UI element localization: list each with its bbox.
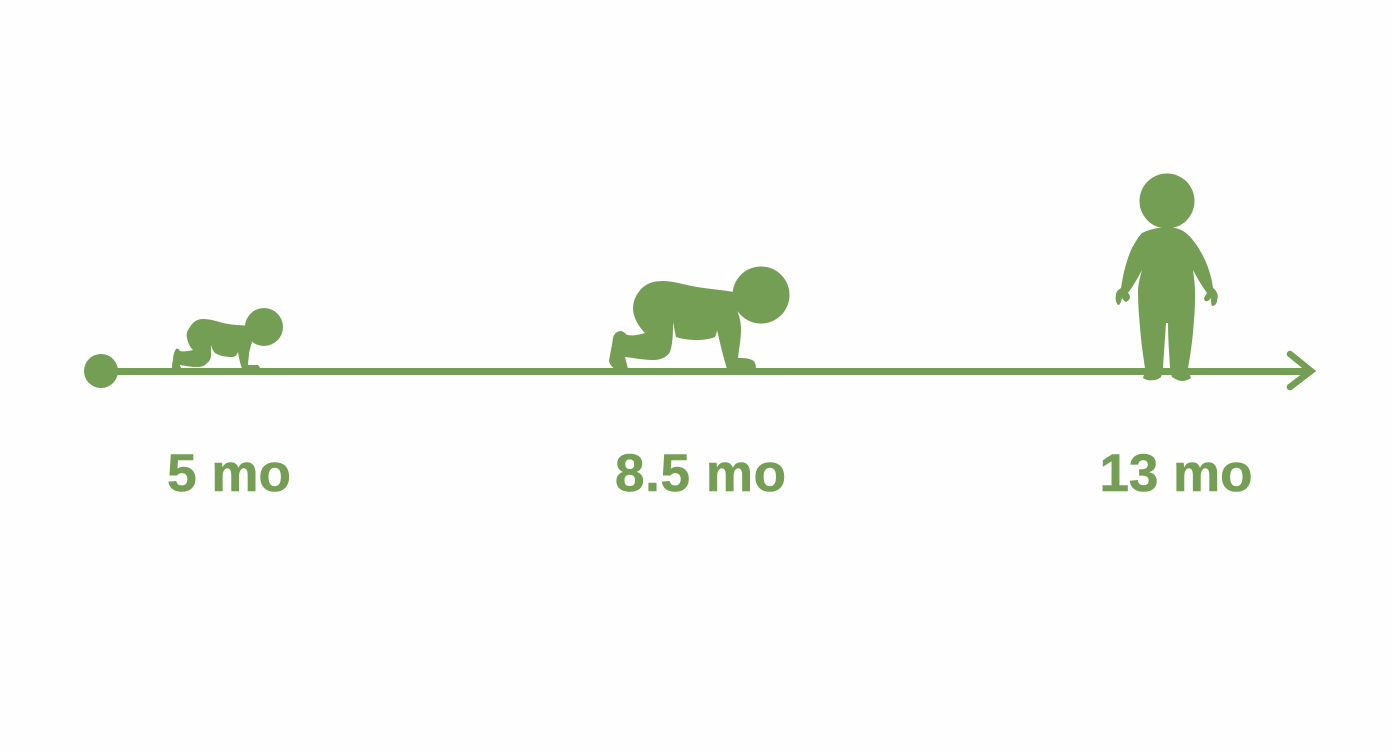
label: 5 months: 5 mo [167,444,291,503]
icon: standing toddler at 13 months [1116,174,1218,381]
label: 13 months: 13 mo [1100,444,1252,503]
icon: larger crawling baby at 8.5 months [609,266,790,369]
icon: small crawling baby at 5 months [172,308,283,369]
label: 8.5 months: 8.5 mo [615,444,786,503]
timeline axis with start dot and arrow [84,354,1311,388]
